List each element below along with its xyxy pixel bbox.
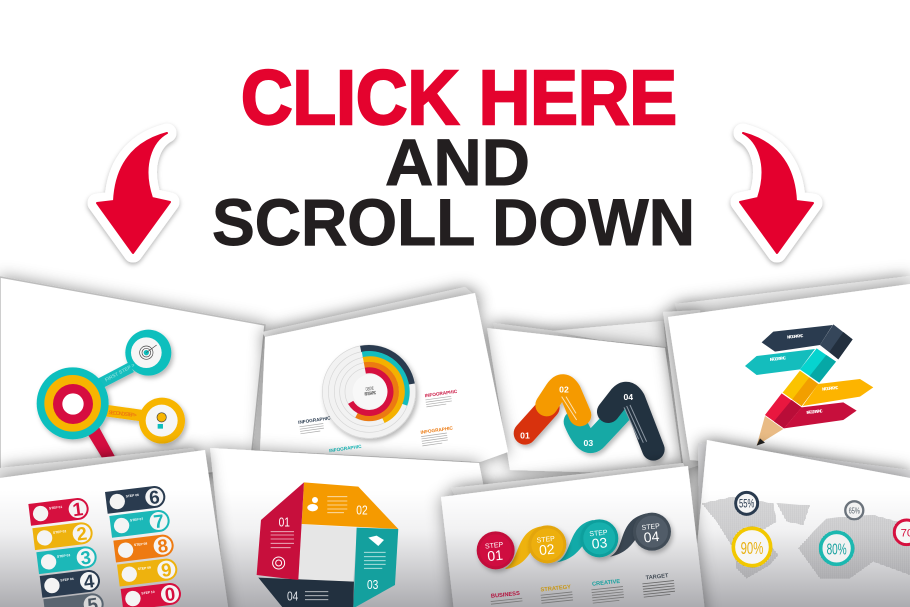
step labels: 02	[559, 384, 569, 394]
red ring	[53, 384, 93, 424]
label 6	[105, 485, 167, 514]
yellow node face	[146, 405, 178, 437]
label 1	[28, 497, 90, 526]
icon: handshake	[368, 536, 384, 546]
arrow: left	[97, 133, 170, 253]
numbers	[279, 503, 378, 603]
pencil wood tip	[757, 416, 783, 446]
pencil yellow side face	[792, 377, 818, 406]
arrow labels	[770, 333, 839, 415]
red caption: INFOGRAPHIC	[425, 389, 458, 398]
business caption	[490, 591, 522, 604]
paper	[260, 293, 508, 462]
back sheet	[663, 310, 715, 470]
label 7: STEP 07	[130, 517, 144, 522]
arc 5 orange	[357, 365, 396, 418]
80 percent marker	[821, 532, 853, 564]
concentric rings	[322, 345, 416, 438]
step 04	[633, 513, 671, 551]
panel: sheet with world map	[690, 440, 910, 607]
step 4 segment	[608, 393, 653, 449]
orange caption: INFOGRAPHIC	[420, 425, 454, 435]
label 0: STEP 10	[141, 590, 155, 595]
teal segment	[353, 528, 398, 607]
70 percent marker	[894, 520, 910, 545]
step circles chart	[477, 513, 675, 604]
icon: bulb	[157, 413, 166, 429]
red caption	[425, 389, 459, 407]
circular chart	[298, 345, 459, 453]
label 4	[40, 569, 101, 598]
label 9: 9	[160, 559, 173, 581]
strategy caption	[540, 584, 573, 603]
zigzag ribbon chart	[520, 384, 653, 449]
pencil lead	[757, 438, 765, 446]
label 2: 2	[75, 522, 88, 545]
step labels: 01	[520, 430, 530, 440]
teal caption: INFOGRAPHIC	[329, 444, 362, 453]
numbers: 01	[279, 515, 290, 529]
label 9: STEP 09	[137, 566, 151, 571]
heading: and: AND	[385, 125, 530, 199]
dark ribbon	[610, 513, 650, 557]
back sheet	[0, 448, 205, 490]
label 8	[113, 533, 175, 562]
step 03: STEP	[589, 529, 608, 538]
back sheet	[493, 323, 665, 365]
paper	[0, 277, 265, 490]
second step connector	[95, 403, 143, 422]
orange caption	[420, 425, 455, 446]
navy caption	[298, 415, 333, 434]
back sheet wedge	[550, 321, 666, 347]
first step connector	[98, 363, 134, 387]
step 02: 02	[538, 541, 556, 558]
yellow circle	[44, 375, 101, 432]
label 2: STEP 02	[53, 529, 67, 535]
step labels	[520, 384, 647, 448]
pencil red section	[765, 393, 802, 428]
teal ribbon	[557, 520, 599, 562]
label 0	[121, 582, 182, 607]
pencil chart	[745, 324, 873, 446]
business caption: BUSINESS	[491, 591, 520, 600]
pencil yellow section	[783, 371, 818, 406]
arrow labels: INFOGRAPHIC	[822, 385, 839, 392]
90 percent marker: 90%	[741, 538, 763, 558]
panel: sheet with connected circles	[0, 277, 265, 490]
navy arrow	[762, 325, 833, 352]
label 6: STEP 06	[125, 493, 139, 498]
step 04: STEP	[641, 523, 661, 532]
label 1: STEP 01	[49, 505, 63, 510]
80 percent marker: 80%	[827, 542, 847, 559]
teal node face	[131, 337, 162, 368]
yellow node	[139, 398, 185, 444]
world map chart	[702, 492, 910, 578]
step 01: 01	[487, 547, 504, 564]
pencil navy section	[820, 324, 853, 359]
arc 4 navy	[361, 348, 412, 384]
paper	[210, 448, 510, 607]
65 percent marker: 65%	[849, 506, 860, 516]
center square	[298, 524, 357, 582]
panel: sheet with numbered steps	[0, 448, 230, 607]
pencil navy side face	[829, 332, 853, 359]
paper	[0, 450, 230, 607]
step 3 segment	[575, 412, 622, 442]
creative caption	[591, 579, 624, 603]
step 03	[580, 519, 618, 557]
arc 3 teal	[362, 354, 407, 405]
paper	[668, 284, 910, 480]
pencil red side face	[774, 400, 802, 428]
label 7	[109, 509, 171, 538]
label 9	[117, 557, 179, 586]
first step label: FIRST STEP >	[104, 363, 136, 383]
arrow labels: INFOGRAPHIC	[770, 355, 786, 362]
arrow: right	[740, 133, 813, 253]
arrow labels: INFOGRAPHIC	[806, 408, 823, 415]
icon: target	[273, 557, 285, 569]
arc 1 red	[351, 370, 390, 413]
label 4: STEP 04	[60, 577, 74, 582]
back sheet	[698, 443, 910, 607]
step labels: 04	[623, 392, 633, 402]
title	[212, 55, 695, 259]
90 percent marker	[733, 528, 771, 566]
teal node	[125, 330, 171, 376]
65 percent marker	[845, 501, 863, 519]
55 percent marker: 55%	[739, 497, 755, 511]
teal base circle	[37, 367, 109, 439]
target caption	[642, 573, 675, 597]
paper	[690, 440, 910, 607]
dotted map	[702, 497, 910, 578]
orange segment	[302, 482, 398, 529]
numbers: 03	[367, 578, 378, 592]
label 3	[36, 545, 98, 574]
second step label: SECOND STEP >	[108, 410, 137, 419]
label 0: 0	[164, 583, 176, 605]
step 01	[477, 531, 515, 569]
yellow arrow	[803, 379, 873, 406]
teal arrow	[745, 349, 815, 375]
pencil teal section	[800, 348, 836, 383]
back sheet	[451, 463, 690, 505]
label 4: 4	[83, 570, 96, 592]
step 03: 03	[591, 534, 608, 552]
label 3: 3	[79, 546, 92, 569]
label 3: STEP 03	[57, 553, 71, 559]
panel: sheet with step circles	[441, 463, 706, 607]
back sheet	[675, 276, 910, 320]
arc 2 yellow	[363, 359, 402, 420]
octagon chart	[257, 482, 398, 607]
arrow labels: INFOGRAPHIC	[787, 333, 804, 340]
yellow ribbon	[505, 527, 547, 569]
connected circles chart	[37, 330, 185, 460]
third step connector	[80, 417, 115, 460]
step 1 segment	[525, 407, 548, 433]
icon: piggy bank	[307, 497, 318, 511]
numbered labels	[28, 485, 182, 607]
paper	[487, 328, 683, 475]
label 8: STEP 08	[134, 542, 148, 547]
label 6: 6	[148, 486, 161, 508]
label 8: 8	[156, 535, 169, 557]
pencil teal side face	[810, 355, 836, 383]
panel: sheet with pencil	[663, 276, 910, 480]
label 2	[32, 521, 94, 550]
center disc	[353, 374, 387, 409]
strategy caption: STRATEGY	[540, 584, 571, 594]
step labels: 03	[584, 438, 593, 448]
step 01: STEP	[485, 542, 504, 551]
numbers: 02	[356, 503, 368, 517]
panel: sheet with zigzag ribbon	[487, 321, 683, 475]
icon: target	[140, 345, 157, 359]
navy caption: INFOGRAPHIC	[298, 415, 331, 425]
ring hole	[62, 393, 84, 415]
red segment	[257, 482, 304, 580]
step 2 segment	[547, 386, 580, 415]
navy segment	[258, 578, 354, 607]
target caption: TARGET	[645, 573, 669, 581]
55 percent marker	[736, 492, 758, 514]
heading: click here: CLICK HERE	[241, 55, 677, 141]
text lines	[271, 497, 386, 600]
creative caption: CREATIVE	[592, 579, 621, 588]
label 1: 1	[71, 498, 84, 520]
paper	[441, 466, 706, 607]
panel: sheet with octagon	[210, 448, 510, 607]
step 02: STEP	[536, 536, 556, 545]
numbers: 04	[287, 589, 298, 603]
circular chart: INFOGRAPHIC	[364, 390, 377, 398]
step 04: 04	[643, 528, 660, 545]
heading: scroll down: SCROLL DOWN	[212, 185, 695, 259]
panel: sheet with circular chart	[260, 287, 508, 462]
label 5	[43, 592, 105, 607]
label 7: 7	[152, 510, 165, 532]
back sheet	[262, 287, 480, 345]
step 02	[528, 525, 566, 563]
circular chart: CREATIVE	[365, 384, 391, 393]
red arrow	[784, 402, 857, 428]
